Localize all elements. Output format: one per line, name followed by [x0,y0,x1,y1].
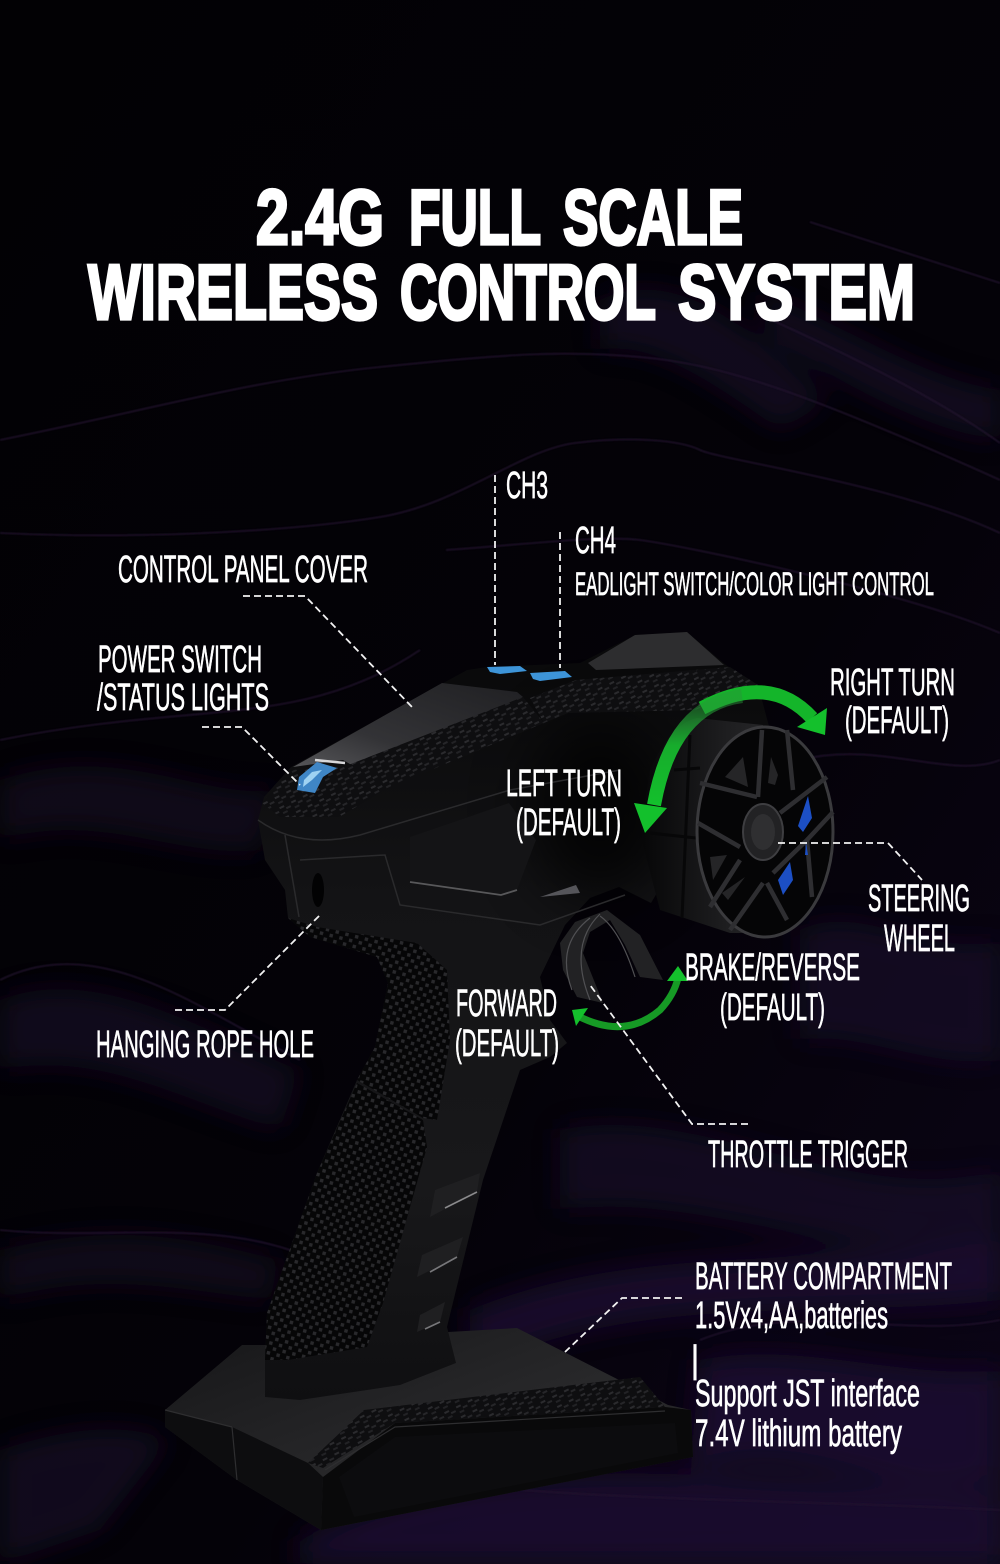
blue accents [778,796,812,895]
label: left turn: LEFT TURN [506,763,622,805]
label: control panel cover: CONTROL PANEL COVER [118,549,368,591]
wheel inner details [710,757,778,900]
dashed leader lines [175,475,922,1352]
carbon band left [262,697,544,817]
label: battery compartment [691,1256,952,1455]
label: left turn: (DEFAULT) [516,802,621,844]
side panel [410,803,536,895]
label: power switch [97,639,269,719]
wheel hub [743,804,783,860]
label: power switch: POWER SWITCH [98,639,262,681]
label: hanging rope hole: HANGING ROPE HOLE [96,1024,314,1066]
grip carbon lower [265,1083,427,1360]
shadow near wheel [530,720,670,900]
small highlight [540,885,580,897]
top cover [293,683,523,767]
label: CH4: CH4 [575,520,616,562]
power switch light [297,760,345,793]
green arrow: forward and brake [572,966,688,1027]
steering wheel [640,718,833,937]
label: forward [455,983,559,1065]
label: steering wheel [868,878,970,960]
label: brake reverse: (DEFAULT) [720,987,825,1029]
label: forward: (DEFAULT) [455,1023,559,1065]
green arrow: right turn [702,692,827,735]
controller [165,632,833,1530]
green arrow: left turn [634,696,742,833]
carbon band right [530,667,758,723]
title: 2.4G [256,173,384,261]
fin [588,632,724,670]
label: CH3: CH3 [506,465,548,507]
blue buttons [487,666,572,681]
label: power switch: /STATUS LIGHTS [97,677,269,719]
label: brake reverse [685,947,860,1029]
throttle trigger [560,910,663,1003]
title: SYSTEM [678,248,915,336]
hanging rope hole [312,873,324,907]
label: left turn [506,763,622,844]
title: WIRELESS [88,248,378,336]
front face detail [258,770,625,925]
title: CONTROL [400,248,656,336]
base [165,1328,693,1530]
label: battery compartment: | [691,1339,699,1381]
wheel spokes [698,730,833,930]
title [88,173,915,336]
label: right turn [830,662,955,742]
title: SCALE [563,173,743,261]
label: forward: FORWARD [456,983,557,1025]
label: brake reverse: BRAKE/REVERSE [685,947,860,989]
grip carbon upper [288,918,450,1120]
main body and handle [258,632,770,1400]
grip ridges [417,1173,480,1332]
title: FULL [409,173,541,261]
